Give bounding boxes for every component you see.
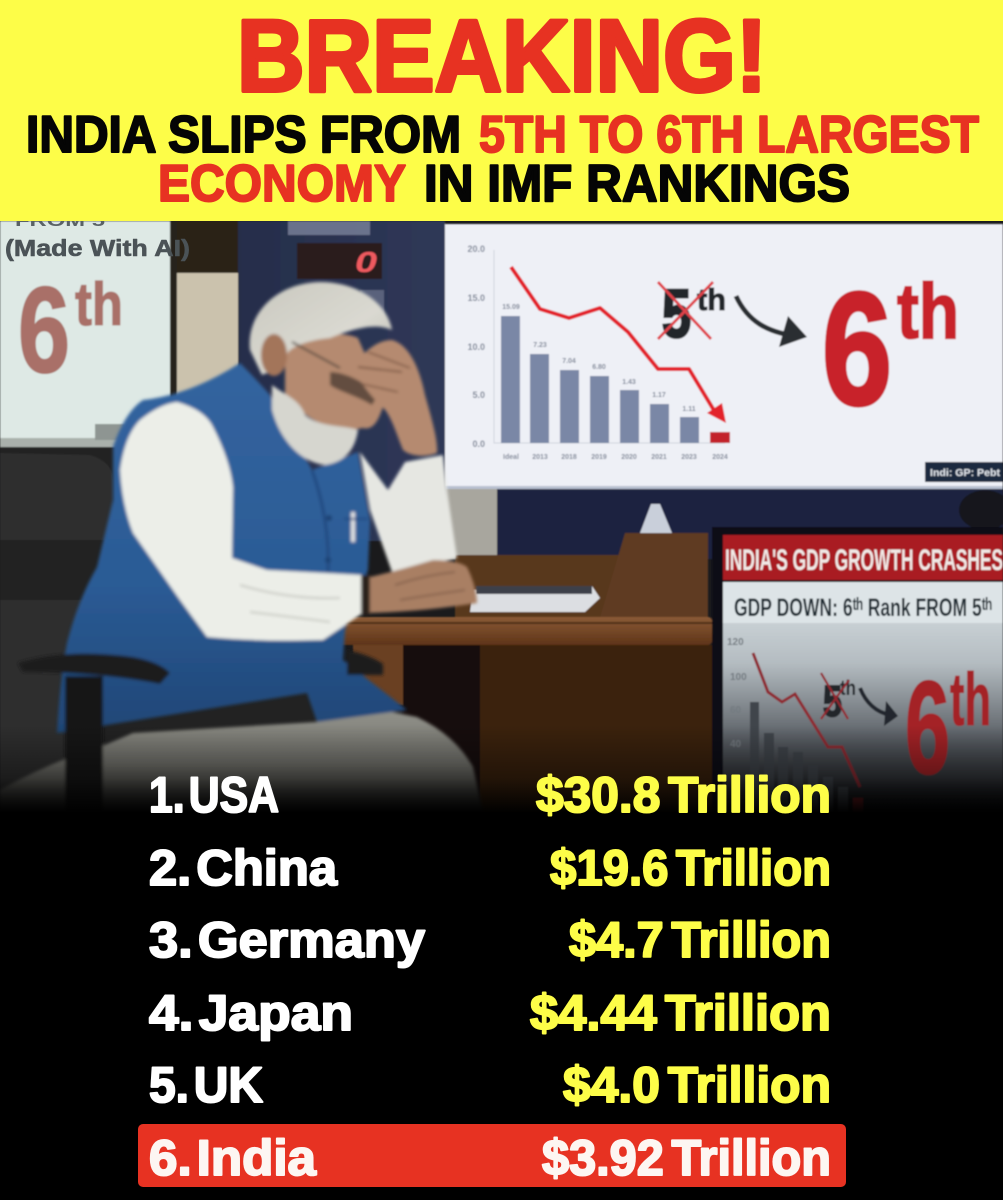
TV chart: 120 xyxy=(727,637,744,648)
left screen cropped text: FROM 5 xyxy=(15,213,105,230)
row: Germany: $4.7 Trillion xyxy=(569,912,831,968)
bar chart: 7.23 xyxy=(533,342,547,349)
row: China: $19.6 Trillion xyxy=(550,840,831,896)
raised hand xyxy=(353,340,437,456)
office chair back xyxy=(0,453,113,813)
resting hand xyxy=(367,560,477,613)
left background screen: th xyxy=(75,271,123,338)
row: Japan: 4. Japan xyxy=(149,985,353,1041)
made with AI note: (Made With AI) xyxy=(5,235,190,261)
TV chart: 60 xyxy=(730,705,742,716)
source badge: Indi: GP: Pebt xyxy=(930,468,1001,479)
title: BREAKING! xyxy=(237,0,767,113)
bar chart: 5.0 xyxy=(472,390,485,400)
row: China: 2. China xyxy=(149,840,338,896)
TV chart: 5 xyxy=(823,677,842,726)
bar chart: 2013 xyxy=(532,454,548,461)
bar chart: 1.43 xyxy=(622,379,636,386)
bar chart: 1.11 xyxy=(682,406,696,413)
left sleeve xyxy=(120,402,363,641)
panel: photo xyxy=(0,213,1003,813)
bar chart: 2020 xyxy=(621,454,637,461)
vest placket and buttons xyxy=(312,470,368,572)
blue vest xyxy=(57,363,407,733)
row: UK: 5. UK xyxy=(149,1057,263,1113)
right background screen xyxy=(445,224,1003,489)
bar chart: 15.0 xyxy=(467,293,485,303)
chair armrest xyxy=(18,654,170,684)
finger creases xyxy=(358,352,410,392)
bar chart: Ideal xyxy=(503,454,519,461)
sleeve folds xyxy=(240,585,340,622)
TV subtitle xyxy=(723,582,1003,623)
right sleeve xyxy=(360,452,457,572)
row: UK: $4.0 Trillion xyxy=(563,1057,831,1113)
arrow xyxy=(736,296,807,347)
crossed out 5th: 5 xyxy=(662,276,691,352)
TV chart: th xyxy=(840,677,856,700)
bar chart: 7.04 xyxy=(562,358,576,365)
TV chart: 100 xyxy=(730,672,747,683)
wristband xyxy=(361,575,370,615)
navy panel with counter: 0 xyxy=(355,247,377,279)
big 6th xyxy=(822,259,959,438)
subtitle line 2: ECONOMY xyxy=(158,155,406,213)
row: USA: 1. USA xyxy=(149,767,279,823)
person xyxy=(0,282,483,813)
TV chart: 40 xyxy=(730,739,742,750)
left background screen: 6 xyxy=(18,262,70,398)
big 6th: th xyxy=(897,267,959,355)
hand creases xyxy=(395,572,465,600)
desk xyxy=(337,533,712,813)
area below right screen xyxy=(445,489,1003,559)
panel: header xyxy=(0,0,1003,221)
bar chart: 2018 xyxy=(561,454,577,461)
big 6th: 6 xyxy=(822,259,892,438)
bar chart: 0.0 xyxy=(472,439,485,449)
crossed out 5th: th xyxy=(697,282,726,317)
bar chart: 2024 xyxy=(712,454,728,461)
head xyxy=(250,282,392,465)
row: USA xyxy=(149,767,831,823)
bar chart: 2019 xyxy=(591,454,607,461)
subtitle line 2 xyxy=(158,155,850,213)
left background screen xyxy=(0,221,170,447)
row: China xyxy=(149,840,831,896)
subtitle line 2: IN IMF RANKINGS xyxy=(424,155,850,213)
row: Germany xyxy=(149,912,831,968)
row: Japan xyxy=(149,985,831,1041)
bar chart: 1.17 xyxy=(652,392,666,399)
bar chart: 20.0 xyxy=(467,244,485,254)
row: India highlighted xyxy=(138,1124,846,1187)
bar chart: 10.0 xyxy=(467,342,485,352)
bar chart: 2023 xyxy=(681,454,697,461)
row: India highlighted: 6. India xyxy=(149,1130,317,1186)
row: UK xyxy=(149,1057,831,1113)
wall strip xyxy=(170,221,238,453)
TV chart: 6 xyxy=(905,654,950,801)
photo scene xyxy=(0,221,1003,813)
navy panel with counter xyxy=(238,221,445,541)
bar chart xyxy=(467,244,730,461)
row: USA: $30.8 Trillion xyxy=(536,767,831,823)
bar chart: 6.80 xyxy=(592,364,606,371)
TV chart xyxy=(727,637,991,813)
right TV screen xyxy=(712,527,1003,813)
row: India highlighted: $3.92 Trillion xyxy=(542,1130,831,1186)
bar chart: 2021 xyxy=(651,454,667,461)
bar chart: 15.09 xyxy=(502,304,520,311)
bottom fade xyxy=(0,725,1003,813)
subtitle line 1: INDIA SLIPS FROM xyxy=(26,106,461,164)
crossed out 5th xyxy=(658,276,726,352)
row: Germany: 3. Germany xyxy=(149,912,425,968)
row: Japan: $4.44 Trillion xyxy=(530,985,831,1041)
subtitle line 1 xyxy=(26,106,979,164)
source badge xyxy=(925,462,1003,482)
trousers xyxy=(0,690,483,813)
panel: GDP rankings table xyxy=(0,767,1003,1200)
